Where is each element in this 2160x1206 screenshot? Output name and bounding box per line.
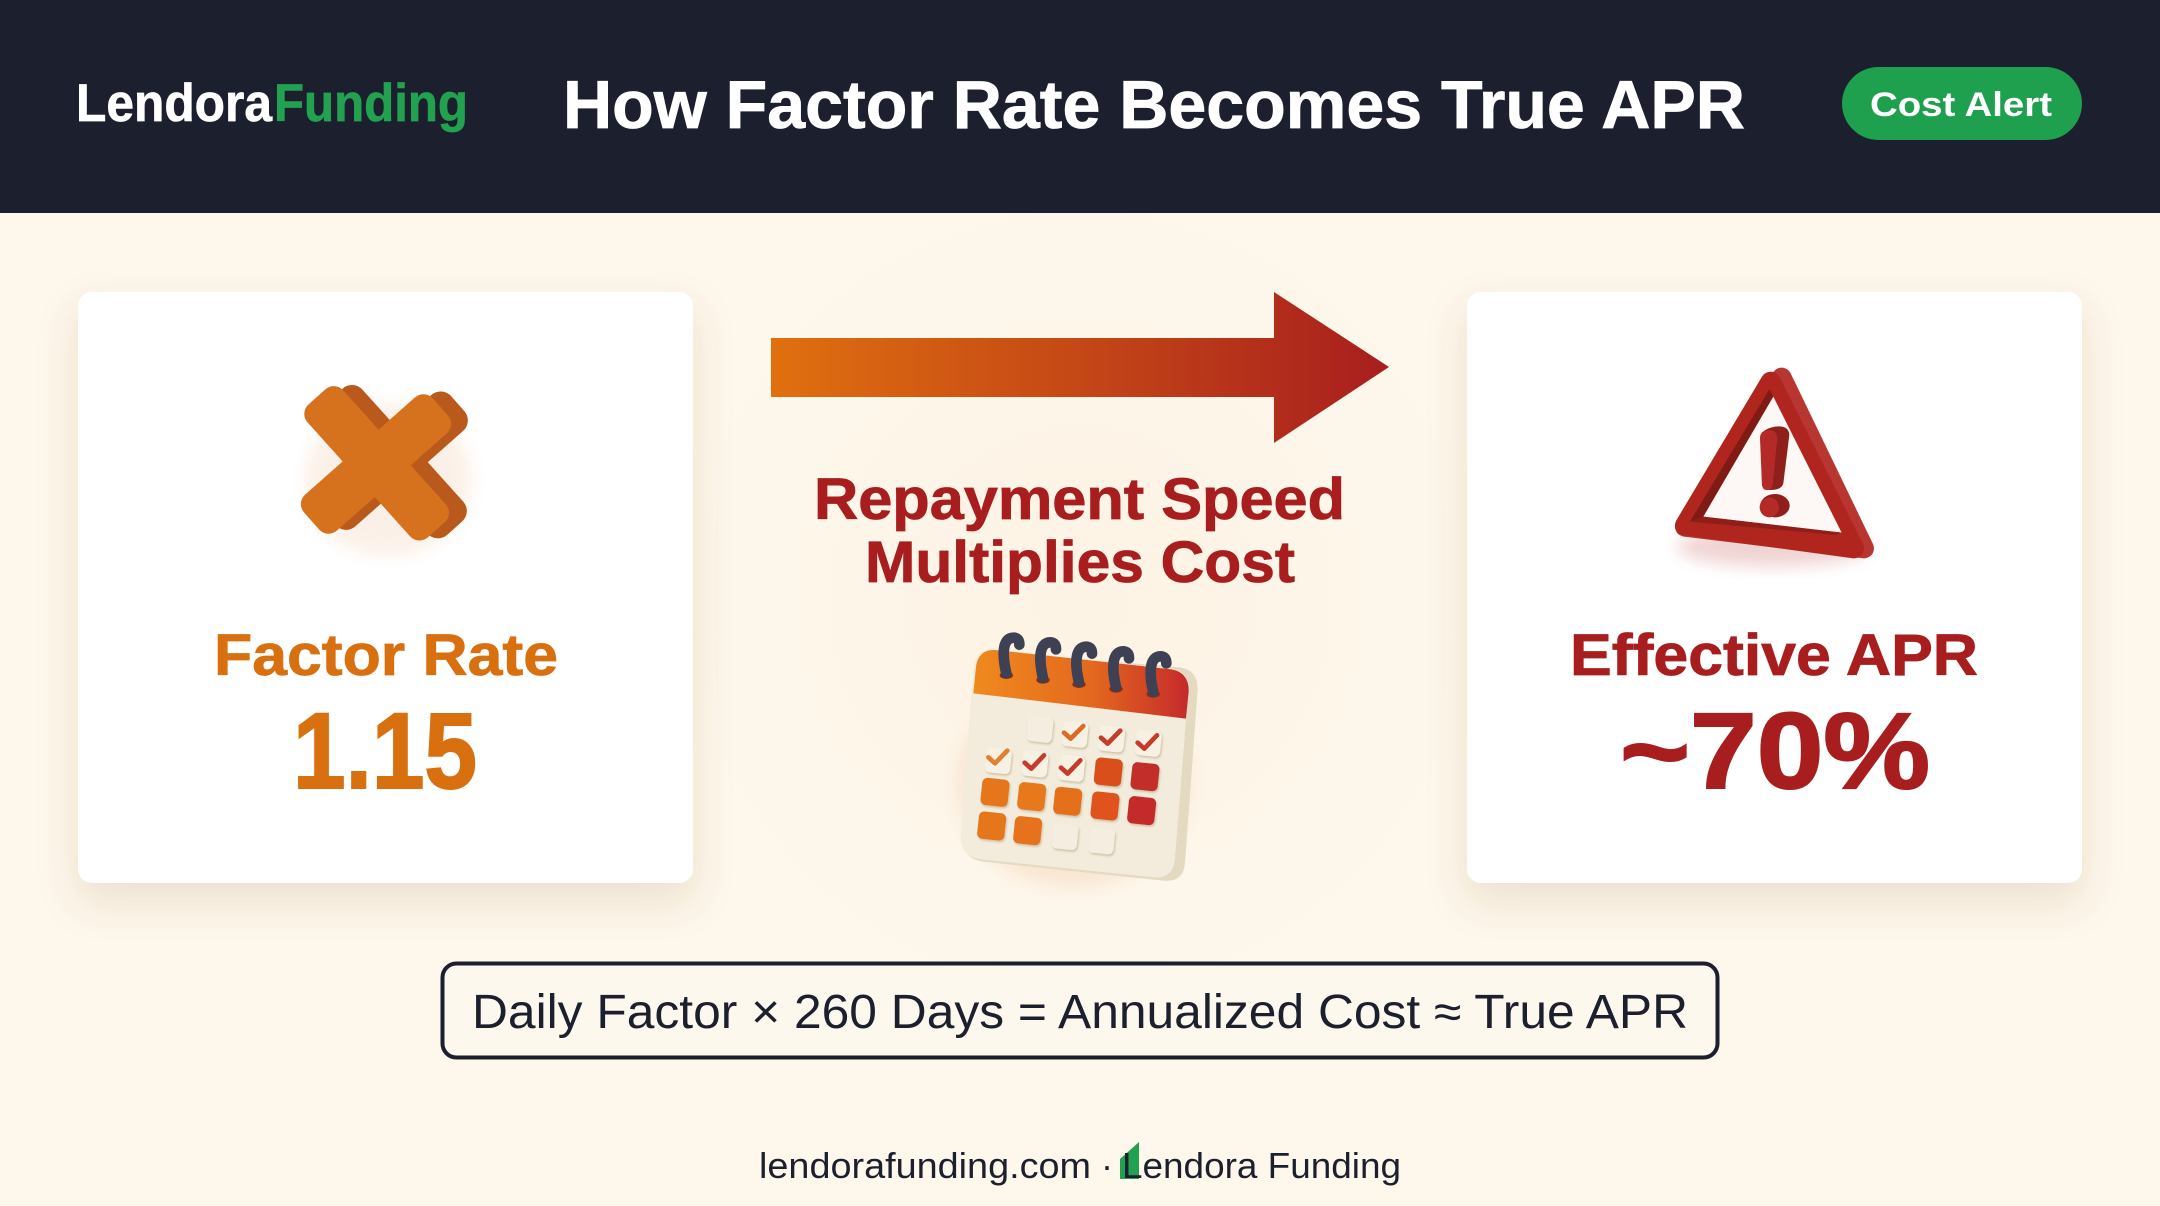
header bar (0, 0, 2160, 213)
label: Factor Rate: Factor Rate (214, 623, 558, 688)
formula box: Daily Factor × 260 Days = Annualized Cost ≈ True APR (472, 986, 1688, 1039)
value: 1.15: 1.15 (293, 690, 477, 811)
label: Effective APR: Effective APR (1570, 623, 1978, 688)
badge: Cost Alert: Cost Alert (1870, 86, 2052, 124)
formula box (442, 964, 1718, 1058)
heading: Repayment Speed Multiplies Cost (814, 467, 1345, 595)
calendar day cells (977, 715, 1162, 855)
icon: calendar (957, 638, 1198, 887)
footer (759, 1142, 1401, 1186)
value: ~70%: ~70% (1620, 690, 1930, 811)
calendar rings (1004, 638, 1166, 692)
badge: Cost Alert (1842, 67, 2082, 140)
logo: LendoraFunding: Funding (274, 74, 468, 133)
logo: LendoraFunding: Lendora (76, 74, 272, 133)
title: How Factor Rate Becomes True APR (563, 67, 1745, 143)
heading: Repayment Speed Multiplies Cost: Multiplies Cost (865, 530, 1295, 595)
panel: factor rate (78, 292, 693, 883)
arrow (771, 292, 1389, 443)
calendar ring holes (1000, 672, 1160, 698)
footer: Lendora Funding (1122, 1145, 1401, 1186)
heading: Repayment Speed Multiplies Cost: Repayment Speed (814, 467, 1345, 532)
icon: green logo mark (1120, 1142, 1139, 1179)
logo: LendoraFunding (76, 74, 468, 133)
icon: warning triangle (1677, 378, 1870, 567)
footer: lendorafunding.com (759, 1145, 1091, 1186)
exclamation mark (1760, 426, 1790, 517)
panel: effective APR (1467, 292, 2082, 883)
footer: · (1101, 1145, 1113, 1186)
calendar check marks (988, 726, 1157, 774)
icon: orange X (296, 379, 474, 557)
